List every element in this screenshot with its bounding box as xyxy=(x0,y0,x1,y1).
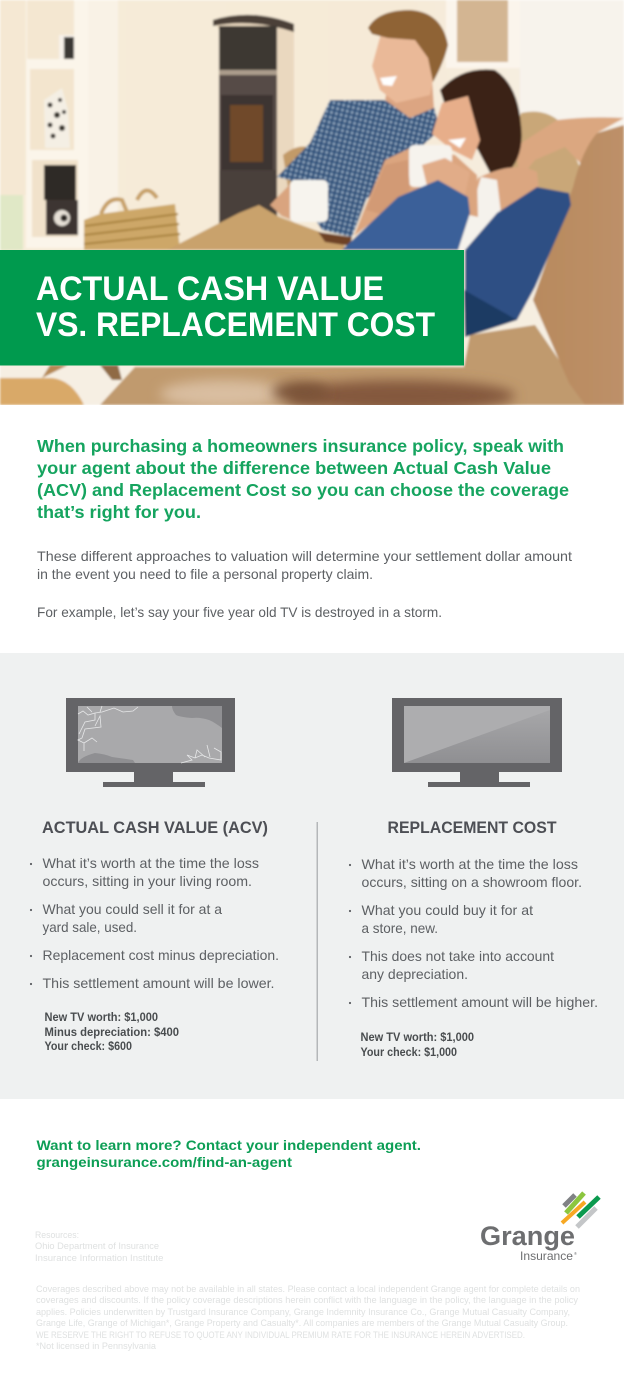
green title banner xyxy=(0,250,464,366)
ACV bullet list: This settlement amount will be lower. xyxy=(42,975,274,991)
logo: Grange Insurance: Insurance xyxy=(520,1249,573,1263)
column: actual cash value xyxy=(30,819,279,1053)
legal fine print: WE RESERVE THE RIGHT TO REFUSE TO QUOTE ANY INDIVIDUAL PREMIUM RATE FOR THE INSURANCE HEREIN ADVERTISED. xyxy=(36,1330,525,1341)
column divider xyxy=(316,822,318,1061)
resources: Ohio Department of Insurance xyxy=(35,1241,159,1252)
intro callout text: your agent about the difference between Actual Cash Value xyxy=(37,458,551,478)
body text xyxy=(37,548,572,620)
intro callout text xyxy=(37,436,569,522)
call to action: Want to learn more? Contact your independent agent. xyxy=(36,1138,421,1153)
title: ACTUAL CASH VALUE xyxy=(36,270,384,308)
chair and left wall below banner xyxy=(0,365,135,405)
call to action xyxy=(36,1138,421,1170)
legal fine print: coverages and discounts. If the policy coverage descriptions herein conflict with the language in the policy, the language in the policy xyxy=(36,1295,578,1306)
logo stripes xyxy=(562,1193,599,1227)
ACV check amounts: Your check: $600 xyxy=(44,1041,132,1053)
logo: Grange Insurance xyxy=(480,1193,599,1263)
couch back xyxy=(500,112,590,240)
resources xyxy=(35,1230,164,1264)
icon: new TV xyxy=(392,698,562,787)
intro callout text: When purchasing a homeowners insurance policy, speak with xyxy=(37,436,564,456)
replacement cost check amounts: New TV worth: $1,000 xyxy=(360,1032,474,1044)
replacement cost bullet list: a store, new. xyxy=(362,920,438,936)
logo: Grange Insurance: Grange xyxy=(480,1221,575,1251)
ACV bullet list: yard sale, used. xyxy=(42,919,137,935)
legal fine print: Grange Life, Grange of Michigan*, Grange Property and Casualty*. All companies are members of the Grange Mutual Casualty Group. xyxy=(36,1318,568,1329)
ACV bullet list: What it’s worth at the time the loss xyxy=(42,855,259,871)
man's pants xyxy=(167,205,346,250)
man's neck and face xyxy=(385,78,434,118)
body text: in the event you need to file a personal property claim. xyxy=(37,566,373,582)
woman's face xyxy=(432,96,480,160)
woman's shoulder and top xyxy=(470,167,540,225)
ACV bullet list xyxy=(30,855,279,991)
ACV check amounts: Minus depreciation: $400 xyxy=(44,1027,179,1039)
ACV check amounts xyxy=(44,1012,179,1053)
woman's arm on couch xyxy=(515,117,624,178)
replacement cost bullet list: This does not take into account xyxy=(362,948,554,964)
wall niche xyxy=(446,0,520,68)
man's hand and mug xyxy=(270,182,298,222)
basket xyxy=(101,190,157,214)
ACV bullet list: What you could sell it for at a xyxy=(42,901,222,917)
intro callout text: that’s right for you. xyxy=(37,502,201,522)
body text: For example, let’s say your five year old TV is destroyed in a storm. xyxy=(37,604,442,620)
couch seat xyxy=(100,325,590,405)
legal fine print: Coverages described above may not be available in all states. Please contact a local independent Grange agent for complete details on xyxy=(36,1284,580,1295)
replacement cost bullet list xyxy=(349,856,598,1010)
title: VS. REPLACEMENT COST xyxy=(36,306,435,344)
ACV bullet list: Replacement cost minus depreciation. xyxy=(42,947,279,963)
replacement cost bullet list: occurs, sitting on a showroom floor. xyxy=(362,874,582,890)
body text: These different approaches to valuation will determine your settlement dollar amount xyxy=(37,548,572,564)
resources: Insurance Information Institute xyxy=(35,1253,164,1264)
legal fine print: *Not licensed in Pennsylvania xyxy=(36,1341,157,1352)
replacement cost bullet list: What it’s worth at the time the loss xyxy=(362,856,578,872)
intro callout text: (ACV) and Replacement Cost so you can choose the coverage xyxy=(37,480,569,500)
hero photo: couple on a couch xyxy=(0,0,624,412)
panel: comparison xyxy=(0,653,624,1099)
legal fine print: applies. Policies underwritten by Trustgard Insurance Company, Grange Indemnity Insurance Co., Grange Mutual Casualty Company, xyxy=(36,1307,570,1318)
ACV check amounts: New TV worth: $1,000 xyxy=(44,1012,158,1024)
replacement cost check amounts xyxy=(360,1032,474,1059)
replacement cost bullet list: What you could buy it for at xyxy=(362,902,533,918)
logo: Grange Insurance: ® xyxy=(574,1251,577,1256)
man's shirt xyxy=(277,100,440,237)
legal fine print xyxy=(36,1284,580,1352)
stove xyxy=(213,15,294,250)
couch right arm xyxy=(533,125,624,405)
replacement cost check amounts: Your check: $1,000 xyxy=(360,1047,457,1059)
heading: ACV: ACTUAL CASH VALUE (ACV) xyxy=(42,819,268,837)
woman's hands and mug xyxy=(354,148,478,236)
woman's hair xyxy=(440,69,522,182)
resources: Resources: xyxy=(35,1230,79,1241)
replacement cost bullet list: This settlement amount will be higher. xyxy=(362,994,598,1010)
call to action: grangeinsurance.com/find-an-agent xyxy=(36,1155,293,1170)
heading: replacement cost: REPLACEMENT COST xyxy=(388,819,556,837)
title xyxy=(36,270,435,344)
jeans xyxy=(342,180,470,250)
replacement cost bullet list: any depreciation. xyxy=(362,966,468,982)
column: replacement cost xyxy=(349,819,598,1059)
icon: broken TV xyxy=(66,698,235,787)
ACV bullet list: occurs, sitting in your living room. xyxy=(42,873,252,889)
